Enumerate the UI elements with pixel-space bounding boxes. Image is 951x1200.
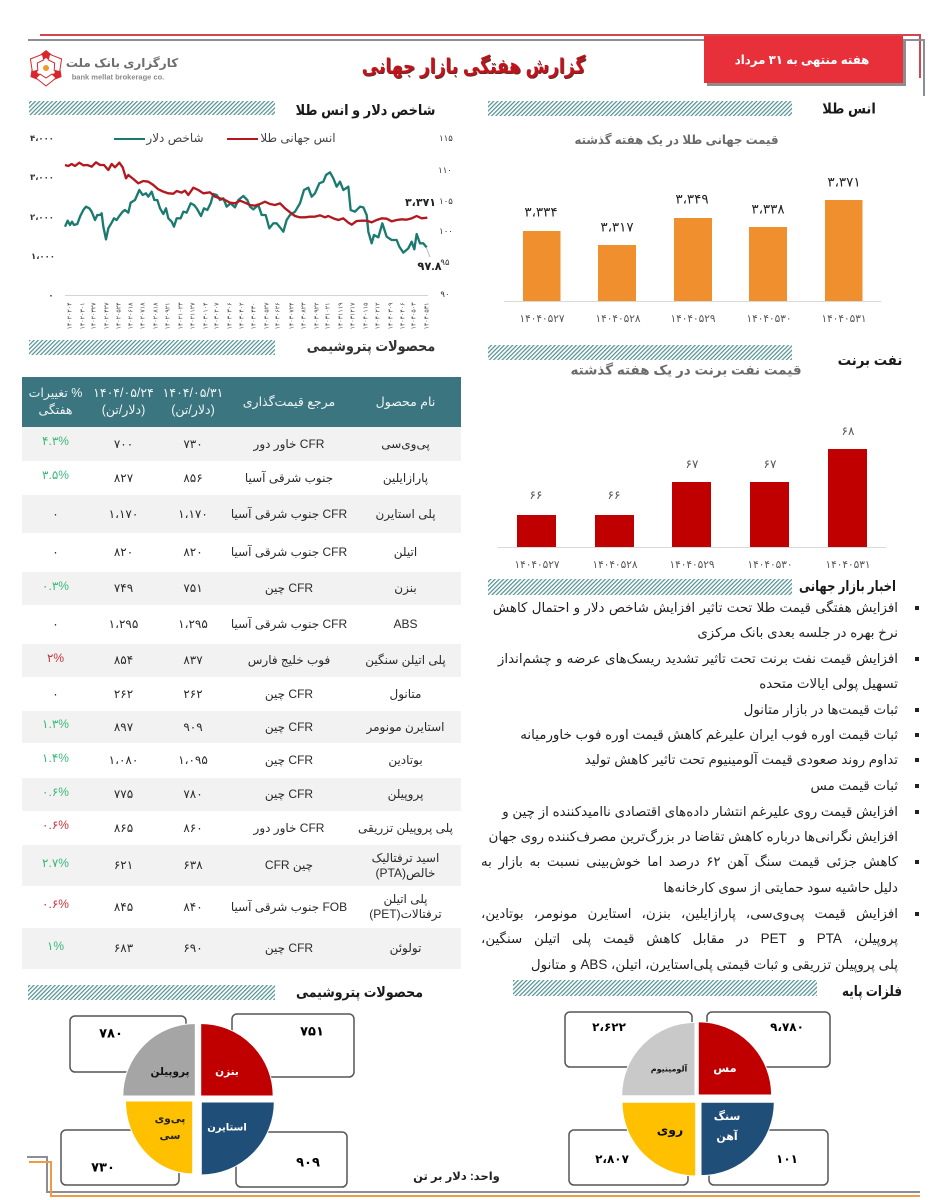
- table: petrochemical prices: پارازایلین: [383, 470, 428, 484]
- box: aluminium price: ۲،۶۲۲: [592, 1020, 627, 1034]
- table: petrochemical prices: چین CFR: [265, 858, 313, 872]
- box: aluminium price: [565, 1012, 692, 1067]
- date axis labels: ۱۴۰۲۰۶۱۸: [128, 302, 134, 330]
- table: petrochemical prices: ۷۰۰: [114, 436, 133, 450]
- table: petrochemical prices: ۷۷۵: [114, 787, 133, 801]
- box: zinc price: [569, 1130, 688, 1185]
- table: petrochemical prices: پلی استایرن: [375, 506, 436, 520]
- section heading: petrochemical products prices: [28, 984, 423, 1000]
- pie quadrant: copper: مس: [713, 1063, 737, 1075]
- brent values: ۶۶: [530, 488, 542, 502]
- brent dates: ۱۴۰۴۰۵۲۹: [669, 559, 715, 571]
- date axis labels: ۱۴۰۳۰۳۰۶: [226, 302, 234, 330]
- table: petrochemical prices: ۲%: [47, 650, 64, 664]
- right axis labels: ۹۰: [440, 289, 450, 299]
- box: PVC price: ۷۳۰: [91, 1160, 115, 1174]
- table: petrochemical prices: ۱،۱۷۰: [178, 506, 208, 520]
- box: iron ore price: ۱۰۱: [776, 1152, 798, 1166]
- table: petrochemical prices: (دلار/تن): [102, 403, 145, 417]
- table: petrochemical prices: ۸۴۰: [183, 900, 203, 914]
- table: petrochemical prices: ۶۳۸: [183, 858, 203, 872]
- date axis labels: ۱۴۰۴۰۱۱۵: [362, 302, 370, 330]
- table: petrochemical prices: جنوب شرقی آسیا: [245, 470, 333, 484]
- date axis labels: ۱۴۰۳۱۰۲۱: [324, 302, 332, 330]
- unit note: واحد: دلار بر تن: [413, 1171, 500, 1184]
- pie quadrant: iron ore: [701, 1102, 774, 1176]
- text block: world market news: تداوم روند صعودی قیمت آلومینیوم تحت تاثیر کاهش تولید: [585, 752, 898, 767]
- box: zinc price: ۲،۸۰۷: [595, 1152, 630, 1166]
- table: petrochemical prices: ۳.۵%: [42, 468, 69, 482]
- page frame bottom lines: [27, 1157, 920, 1196]
- date axis labels: ۱۴۰۲۰۵۲۴: [116, 302, 122, 330]
- table: petrochemical prices: (دلار/تن): [171, 403, 215, 417]
- table: petrochemical prices: ۸۲۰: [114, 545, 133, 559]
- brent values: [530, 424, 855, 502]
- table: petrochemical prices: تولوئن: [390, 941, 421, 955]
- table: petrochemical prices: ۱۴۰۴/۰۵/۳۱: [163, 386, 223, 400]
- pie quadrant: zinc: روی: [657, 1123, 683, 1137]
- dollar index line: [65, 172, 427, 253]
- date axis labels: ۱۴۰۲۰۲۰۴: [66, 302, 74, 330]
- box: copper price: ۹،۷۸۰: [770, 1020, 804, 1034]
- section heading: dollar index and gold ounce: [29, 101, 435, 119]
- table: petrochemical prices: [22, 377, 461, 969]
- table: petrochemical prices: ترفتالات(PET): [369, 907, 442, 921]
- pie quadrant: PVC: پی‌وی: [155, 1113, 185, 1125]
- text block: world market news: افزایش قیمت روی علیرغم انتشار داده‌های اقتصادی ناامیدکننده از چین و: [502, 804, 898, 819]
- week badge: هفته منتهی به ۳۱ مرداد: [735, 53, 869, 67]
- section heading: gold ounce: انس طلا: [822, 101, 876, 117]
- brent bars: [517, 449, 867, 547]
- brent dates: ۱۴۰۴۰۵۳۰: [747, 559, 793, 571]
- table: petrochemical prices: ۸۲۷: [114, 470, 133, 484]
- table: petrochemical prices: CFR چین: [265, 753, 313, 767]
- table: petrochemical prices: خالص(PTA): [376, 866, 435, 880]
- table: petrochemical prices: ۰: [52, 617, 59, 631]
- logo: bank mellat brokerage co.: [72, 72, 164, 82]
- logo: کارگزاری بانک ملت: [66, 56, 178, 70]
- table: petrochemical prices: ۸۴۵: [114, 900, 133, 914]
- pie quadrant: PVC: [126, 1101, 193, 1174]
- gold bars: [523, 200, 862, 301]
- date axis labels: ۱۴۰۲۰۴۲۷: [104, 302, 110, 330]
- box: styrene price: ۹۰۹: [296, 1154, 320, 1170]
- section heading: gold ounce: [488, 101, 876, 117]
- table: petrochemical prices: ۷۸۰: [183, 787, 203, 801]
- chart legend: شاخص دلار: [145, 131, 204, 146]
- table: petrochemical prices: ۱.۴%: [42, 750, 69, 764]
- bar chart: brent: [498, 362, 886, 571]
- table: petrochemical prices: CFR خاور دور: [254, 820, 324, 834]
- table: petrochemical prices: ۱۴۰۴/۰۵/۲۴: [93, 386, 154, 400]
- table: petrochemical prices: ۸۲۰: [183, 545, 203, 559]
- chart legend: انس جهانی طلا: [260, 131, 336, 146]
- table: petrochemical prices: ۰.۶%: [42, 784, 69, 798]
- section heading: dollar index and gold ounce: شاخص دلار و انس طلا: [296, 102, 435, 119]
- right axis labels: ۱۰۵: [439, 196, 453, 206]
- table: petrochemical prices: بوتادین: [388, 753, 423, 767]
- table: petrochemical prices: ۲.۷%: [42, 856, 69, 870]
- pie panel: base metals: [565, 1012, 830, 1185]
- table: petrochemical prices: ۸۵۴: [114, 653, 133, 667]
- left axis labels: ۱،۰۰۰: [31, 251, 55, 261]
- table: petrochemical prices: CFR چین: [265, 720, 313, 734]
- date axis labels: [66, 302, 430, 330]
- table: petrochemical prices: ۸۶۵: [114, 820, 133, 834]
- gold dates: ۱۴۰۴۰۵۲۸: [595, 313, 641, 325]
- pie quadrant: zinc: [622, 1102, 696, 1176]
- date axis labels: ۱۴۰۴۰۵۰۳: [410, 302, 418, 330]
- pie quadrant: propylene: پروپیلن: [151, 1066, 190, 1078]
- table: petrochemical prices: ۱،۲۹۵: [109, 617, 138, 631]
- section heading: base metals: فلزات پایه: [842, 983, 902, 999]
- left axis labels: ۲،۰۰۰: [30, 212, 54, 222]
- pie quadrant: aluminium: [622, 1022, 695, 1096]
- table: petrochemical prices: CFR جنوب شرقی آسیا: [231, 506, 347, 520]
- text block: world market news: افزایش نگرانی‌ها درباره کاهش تقاضا در بزرگ‌ترین مصرف‌کننده روی جهان: [489, 829, 898, 844]
- table: petrochemical prices: ۸۵۶: [183, 470, 203, 484]
- gold last value: ۳،۳۷۱: [405, 197, 436, 209]
- table: petrochemical prices: ۰: [52, 506, 59, 520]
- table: petrochemical prices: CFR چین: [265, 581, 313, 595]
- pie panel: petrochemical prices: [61, 1014, 354, 1187]
- box: propylene price: [70, 1016, 186, 1072]
- date axis labels: ۱۴۰۳۱۲۱۷: [350, 302, 356, 330]
- text block: world market news: ثبات قیمت‌ها در بازار متانول: [744, 702, 898, 717]
- date axis labels: ۱۴۰۳۰۴۰۲: [238, 302, 246, 330]
- brent dates: [514, 559, 871, 571]
- gold dates: ۱۴۰۴۰۵۳۰: [746, 313, 792, 325]
- table: petrochemical prices: ۲۶۲: [114, 686, 133, 700]
- date axis labels: ۱۴۰۲۱۰۲۳: [178, 302, 184, 330]
- table: petrochemical prices: ۱،۱۷۰: [109, 506, 138, 520]
- left axis labels: [30, 133, 55, 300]
- date axis labels: ۱۴۰۳۰۷۲۴: [288, 302, 296, 330]
- pie quadrant: styrene: استایرن: [207, 1122, 247, 1134]
- table: petrochemical prices: ۷۳۰: [183, 436, 203, 450]
- bar chart: gold: [504, 132, 881, 325]
- table: petrochemical prices: ۰.۶%: [42, 897, 69, 911]
- date axis labels: ۱۴۰۴۰۲۱۲: [374, 302, 382, 330]
- pie quadrant: iron ore: سنگ: [714, 1109, 740, 1123]
- gold values: ۳،۳۳۴: [524, 204, 558, 220]
- section heading: brent oil: نفت برنت: [838, 352, 902, 369]
- pie quadrant: iron ore: آهن: [716, 1129, 738, 1143]
- pie quadrant: PVC: سی: [160, 1130, 180, 1142]
- table: petrochemical prices: ۰.۶%: [42, 818, 69, 832]
- date axis labels: ۱۴۰۳۱۱۱۹: [338, 302, 344, 330]
- section heading: petrochemical products: [29, 338, 435, 355]
- table: petrochemical prices: اسید ترفتالیک: [372, 850, 439, 864]
- table: petrochemical prices: ۶۲۱: [114, 858, 133, 872]
- table: petrochemical prices: ۱،۰۹۵: [178, 753, 208, 767]
- line chart: dollar index and gold: [30, 131, 453, 330]
- date axis labels: ۱۴۰۲۰۸۱۸: [152, 302, 160, 330]
- table: petrochemical prices: CFR جنوب شرقی آسیا: [231, 617, 347, 631]
- table: petrochemical prices: ۸۳۷: [183, 653, 203, 667]
- date axis labels: ۱۴۰۲۰۷۱۸: [140, 302, 146, 330]
- date axis labels: ۱۴۰۳۰۶۲۶: [274, 302, 282, 330]
- text block: world market news: ثبات قیمت اوره فوب ایران علیرغم کاهش قیمت اوره فوب خاورمیانه: [520, 727, 898, 742]
- table: petrochemical prices: ۷۴۹: [114, 581, 133, 595]
- text block: world market news: افزایش هفتگی قیمت طلا تحت تاثیر افزایش شاخص دلار و احتمال کاهش: [493, 600, 898, 615]
- table: petrochemical prices: هفتگی: [38, 403, 72, 417]
- gold dates: ۱۴۰۴۰۵۳۱: [821, 313, 867, 325]
- text block: world market news: افزایش قیمت پی‌وی‌سی، پارازایلین، بنزن، استایرن مونومر، بوتادین،: [481, 906, 898, 921]
- brent values: ۶۶: [608, 488, 620, 502]
- table: petrochemical prices: پروپیلن: [388, 787, 423, 801]
- brent chart subtitle: قیمت نفت برنت در یک هفته گذشته: [570, 362, 802, 378]
- table: petrochemical prices: ۸۹۷: [114, 720, 133, 734]
- right axis labels: ۱۰۰: [439, 226, 453, 236]
- right axis labels: ۱۱۵: [439, 133, 453, 143]
- section heading: base metals: [513, 980, 902, 999]
- right axis labels: ۱۱۰: [438, 165, 452, 175]
- table: petrochemical prices: ۱.۳%: [42, 717, 69, 731]
- date axis labels: ۱۴۰۳۰۱۰۴: [202, 302, 210, 330]
- table: petrochemical prices: ۷۵۱: [183, 581, 203, 595]
- pie quadrant: styrene: [201, 1102, 274, 1175]
- date axis labels: ۱۴۰۴۰۴۰۶: [400, 302, 406, 330]
- page frame top lines: [28, 35, 924, 96]
- table: petrochemical prices: % تغییرات: [29, 386, 82, 400]
- table: petrochemical prices: ۱،۲۹۵: [178, 617, 208, 631]
- right axis labels: [438, 133, 453, 299]
- box: benzene price: ۷۵۱: [300, 1024, 324, 1038]
- table: petrochemical prices: استایرن مونومر: [366, 720, 444, 734]
- text block: world market news: نرخ بهره در جلسه بعدی بانک مرکزی: [697, 625, 898, 640]
- box: propylene price: ۷۸۰: [99, 1026, 123, 1040]
- gold values: [524, 174, 861, 234]
- table: petrochemical prices: ۶۹۰: [183, 941, 203, 955]
- date axis labels: ۱۴۰۲۰۹۲۱: [164, 302, 172, 330]
- brent values: ۶۷: [686, 457, 699, 471]
- text block: world market news: ثبات قیمت مس: [811, 778, 898, 793]
- gold ounce line: [65, 162, 427, 225]
- table: petrochemical prices: پلی اتیلن سنگین: [365, 653, 446, 667]
- gold values: ۳،۳۷۱: [827, 174, 861, 190]
- date axis labels: ۱۴۰۲۰۳۲۷: [90, 302, 98, 330]
- pie quadrant: copper: [698, 1022, 772, 1095]
- text block: world market news: پروپیلن، PTA و PET در مقابل کاهش قیمت پلی اتیلن سنگین،: [481, 931, 898, 946]
- date axis labels: ۱۴۰۳۰۹۲۲: [314, 302, 320, 330]
- date axis labels: ۱۴۰۲۰۳۰۱: [80, 302, 86, 330]
- table: petrochemical prices: ۰: [52, 686, 59, 700]
- table: petrochemical prices: متانول: [390, 686, 421, 700]
- table: petrochemical prices: ۰.۳%: [42, 578, 69, 592]
- dollar last value: ۹۷.۸: [417, 261, 442, 273]
- text block: world market news: کاهش جزئی قیمت سنگ آهن ۶۲ درصد اما خوش‌بینی نسبت به بازار به: [481, 854, 898, 869]
- table: petrochemical prices: CFR جنوب شرقی آسیا: [231, 545, 347, 559]
- table: petrochemical prices: CFR چین: [265, 686, 313, 700]
- gold values: ۳،۳۱۷: [600, 220, 634, 234]
- table: petrochemical prices: نام محصول: [376, 394, 435, 408]
- table: petrochemical prices: ۶۸۳: [114, 941, 133, 955]
- section heading: petrochemical products prices: محصولات پتروشیمی: [296, 984, 423, 1000]
- pie quadrant: benzene: [201, 1024, 273, 1096]
- left axis labels: ۳،۰۰۰: [30, 172, 54, 182]
- table: petrochemical prices: بنزن: [394, 581, 417, 595]
- brent dates: ۱۴۰۴۰۵۲۸: [592, 559, 638, 571]
- box: iron ore price: [709, 1130, 828, 1185]
- logo: [25, 50, 178, 86]
- brent values: ۶۷: [764, 457, 777, 471]
- table: petrochemical prices: ۹۰۹: [183, 720, 203, 734]
- text block: world market news: [481, 600, 919, 972]
- gold values: ۳،۳۳۸: [751, 202, 785, 216]
- section heading: petrochemical products: محصولات پتروشیمی: [307, 338, 435, 355]
- table: petrochemical prices: ۲۶۲: [183, 686, 203, 700]
- left axis labels: ۰: [48, 290, 54, 300]
- pie quadrant: aluminium: آلومینیوم: [651, 1064, 687, 1074]
- text block: world market news: پلی پروپیلن تزریقی و ثبات قیمتی پلی‌استایرن، اتیلن، ABS و متانول: [531, 957, 898, 972]
- table: petrochemical prices: ۱%: [47, 938, 64, 952]
- table: petrochemical prices: پلی اتیلن: [383, 892, 428, 906]
- gold chart subtitle: قیمت جهانی طلا در یک هفته گذشته: [574, 132, 779, 147]
- brent dates: ۱۴۰۴۰۵۳۱: [825, 559, 871, 571]
- table: petrochemical prices: اتیلن: [394, 545, 417, 559]
- table: petrochemical prices: مرجع قیمت‌گذاری: [243, 394, 335, 408]
- right axis labels: ۹۵: [440, 257, 450, 267]
- chart legend: [114, 131, 336, 146]
- gold dates: ۱۴۰۴۰۵۲۹: [670, 313, 716, 325]
- table: petrochemical prices: پی‌وی‌سی: [381, 436, 430, 450]
- date axis labels: ۱۴۰۲۱۱۲۷: [190, 302, 196, 330]
- table: petrochemical prices: ۴.۳%: [42, 434, 69, 448]
- section heading: brent oil: [488, 345, 902, 369]
- gold dates: [519, 313, 867, 325]
- box: benzene price: [232, 1014, 354, 1077]
- table: petrochemical prices: CFR خاور دور: [254, 436, 324, 450]
- table: petrochemical prices: CFR چین: [265, 941, 313, 955]
- box: copper price: [707, 1012, 830, 1067]
- table: petrochemical prices: پلی پروپیلن تزریقی: [358, 820, 453, 834]
- box: PVC price: [61, 1130, 179, 1185]
- section heading: world market news: [488, 578, 896, 595]
- text block: world market news: افزایش قیمت نفت برنت تحت تاثیر تشدید ریسک‌های عرضه و چشم‌انداز: [498, 651, 898, 666]
- table: petrochemical prices: CFR چین: [265, 787, 313, 801]
- date axis labels: ۱۴۰۳۰۴۳۰: [250, 302, 258, 330]
- brent dates: ۱۴۰۴۰۵۲۷: [514, 559, 560, 571]
- section heading: world market news: اخبار بازار جهانی: [799, 578, 896, 594]
- text block: world market news: دلیل حاشیه سود حمایتی از سوی کارخانه‌ها: [663, 880, 898, 895]
- gold dates: ۱۴۰۴۰۵۲۷: [519, 313, 565, 325]
- table: petrochemical prices: FOB جنوب شرقی آسیا: [231, 900, 347, 914]
- week badge: [704, 36, 906, 86]
- date axis labels: ۱۴۰۳۰۲۰۷: [214, 302, 220, 330]
- gold values: ۳،۳۴۹: [675, 192, 709, 206]
- box: styrene price: [236, 1132, 347, 1187]
- table: petrochemical prices: ۱،۰۸۰: [109, 753, 138, 767]
- table: petrochemical prices: ABS: [393, 617, 418, 631]
- text block: world market news: تسهیل پولی ایالات متحده: [759, 676, 898, 691]
- date axis labels: ۱۴۰۴۰۳۰۹: [388, 302, 394, 330]
- left axis labels: ۴،۰۰۰: [30, 133, 54, 143]
- table: petrochemical prices: ۰: [52, 545, 59, 559]
- brent values: ۶۸: [842, 424, 855, 438]
- date axis labels: ۱۴۰۳۰۵۲۷: [264, 302, 270, 330]
- table: petrochemical prices: ۸۶۰: [183, 820, 203, 834]
- pie quadrant: benzene: بنزن: [215, 1066, 239, 1078]
- date axis labels: ۱۴۰۴۰۵۳۱: [424, 302, 430, 330]
- table: petrochemical prices: فوب خلیج فارس: [248, 653, 330, 667]
- pie quadrant: propylene: [123, 1024, 195, 1096]
- title: گزارش هفتگی بازار جهانی: [362, 53, 585, 79]
- date axis labels: ۱۴۰۳۰۸۲۳: [300, 302, 308, 330]
